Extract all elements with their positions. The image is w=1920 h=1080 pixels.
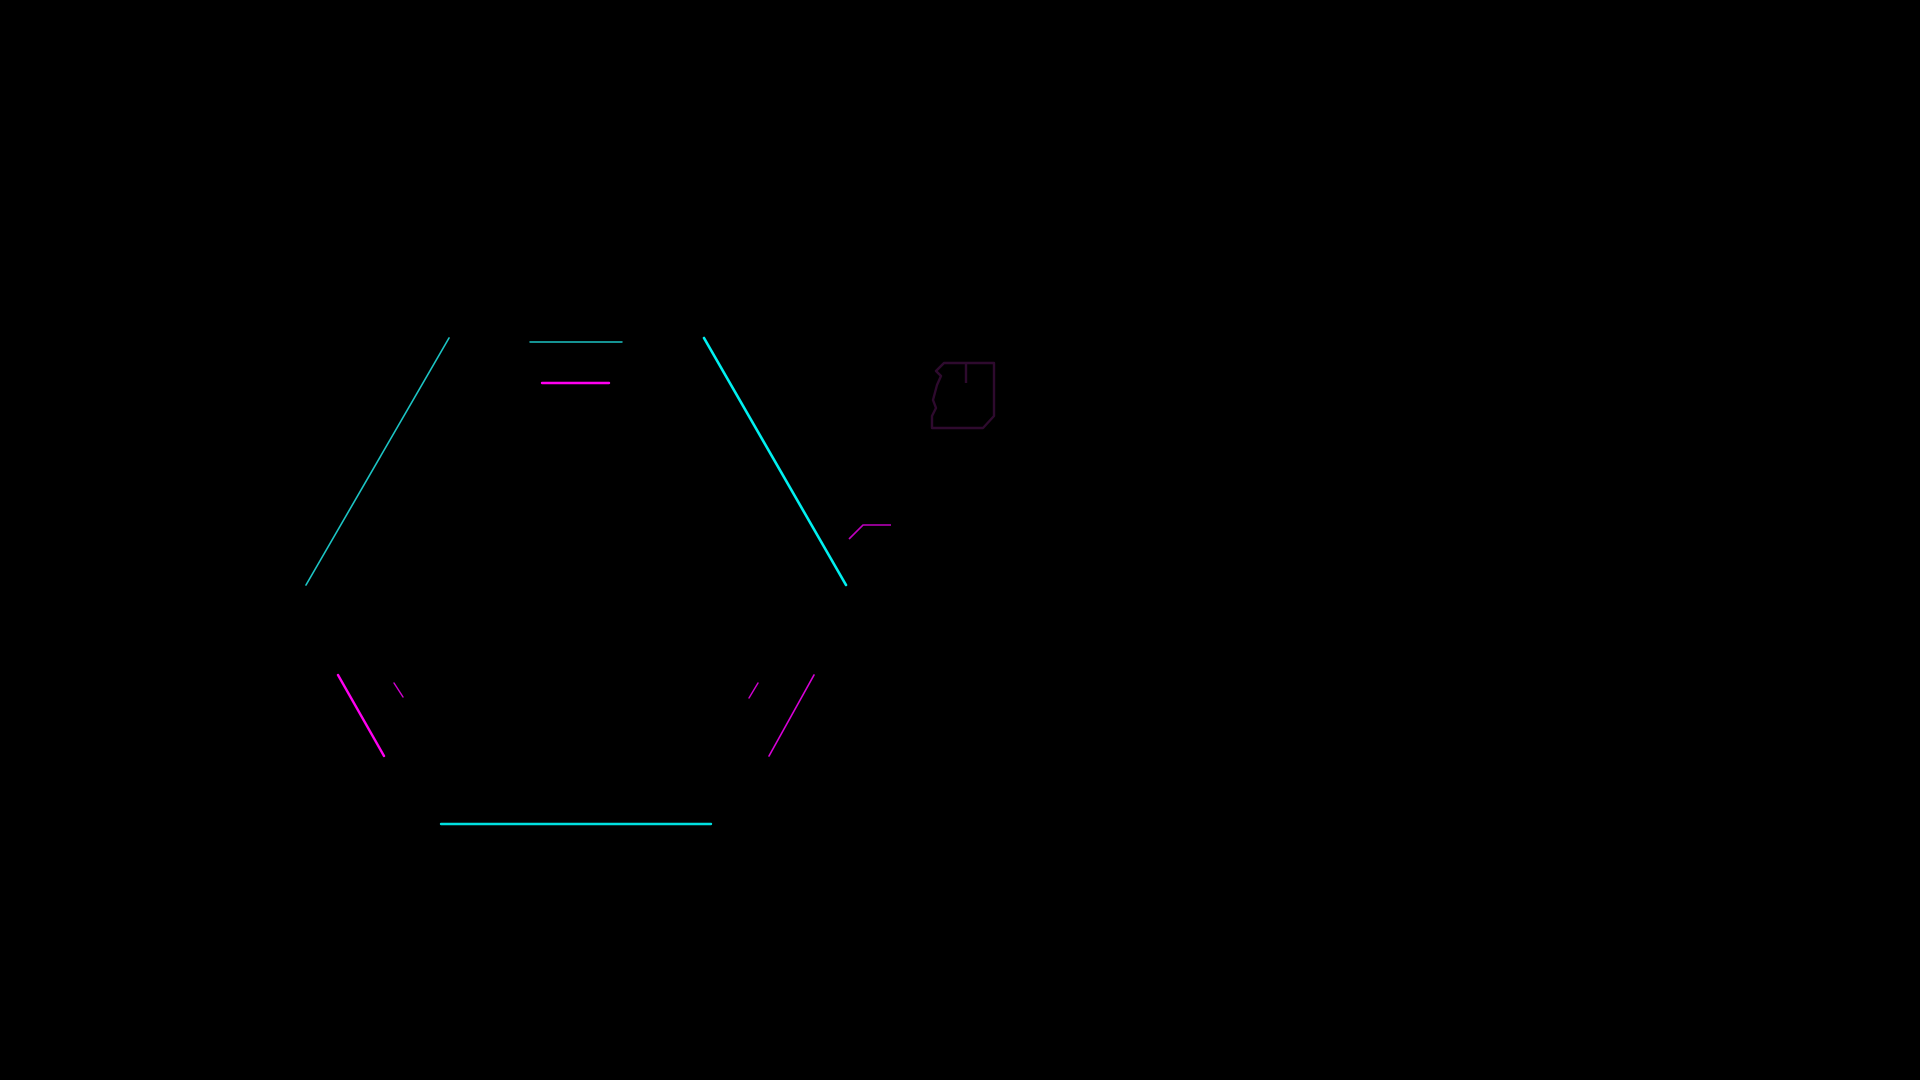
edge: bottom cyan — [441, 823, 711, 825]
edge: bottom-right magenta — [769, 675, 814, 756]
hexagon: neon edges — [306, 338, 846, 824]
edge: bottom-left magenta — [338, 675, 384, 756]
tick: bottom-right small — [749, 683, 758, 698]
tick: bottom-left small — [394, 683, 403, 697]
edge: top-right cyan — [704, 338, 846, 585]
edge: top-left teal — [306, 338, 449, 585]
accent: magenta bar — [542, 382, 609, 384]
edge: top short cyan — [530, 341, 622, 343]
icon: dark purple document — [932, 363, 994, 428]
callout: magenta leader — [849, 525, 891, 539]
